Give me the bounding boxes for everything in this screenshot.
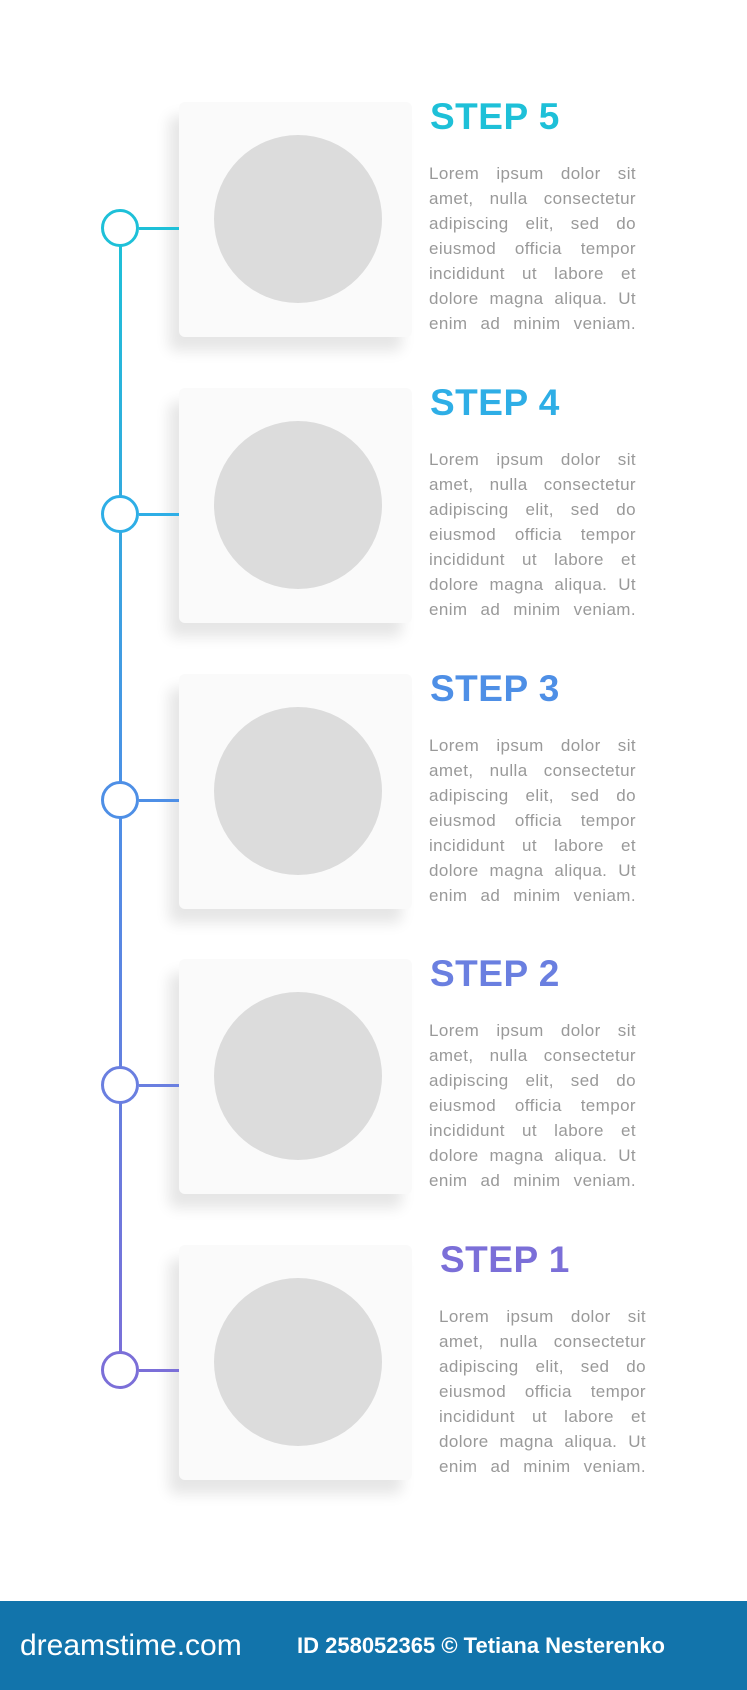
footer [0, 1601, 747, 1690]
connector 2 [139, 1084, 179, 1087]
text 2: enim ad minim veniam. [429, 1171, 636, 1190]
step 1 [101, 1239, 646, 1497]
text 3: amet, nulla consectetur [429, 761, 636, 780]
text 3: enim ad minim veniam. [429, 886, 636, 905]
text 2: incididunt ut labore et [429, 1121, 636, 1140]
connector 3 [139, 799, 179, 802]
text 5: enim ad minim veniam. [429, 314, 636, 333]
title 2: STEP 2 [430, 953, 560, 994]
text 2: Lorem ipsum dolor sit [429, 1021, 636, 1040]
text 5: adipiscing elit, sed do [429, 214, 636, 233]
text 5: incididunt ut labore et [429, 264, 636, 283]
text 4: eiusmod officia tempor [429, 525, 636, 544]
text 1: adipiscing elit, sed do [439, 1357, 646, 1376]
text 2: amet, nulla consectetur [429, 1046, 636, 1065]
text 2: adipiscing elit, sed do [429, 1071, 636, 1090]
step 5 [101, 96, 636, 354]
title 1: STEP 1 [440, 1239, 570, 1280]
text 3: Lorem ipsum dolor sit [429, 736, 636, 755]
text 1: eiusmod officia tempor [439, 1382, 646, 1401]
text 5: eiusmod officia tempor [429, 239, 636, 258]
card 2 [179, 959, 412, 1194]
text 3 [429, 736, 636, 905]
connector 5 [139, 227, 179, 230]
timeline line [119, 245, 122, 1370]
footer logo: dreamstime.com [20, 1629, 242, 1662]
text 4 [429, 450, 636, 619]
text 3: dolore magna aliqua. Ut [429, 861, 636, 880]
connector 1 [139, 1369, 179, 1372]
title 4: STEP 4 [430, 382, 560, 423]
card 5 [179, 102, 412, 337]
text 3: incididunt ut labore et [429, 836, 636, 855]
node 4 [101, 495, 139, 533]
text 5: dolore magna aliqua. Ut [429, 289, 636, 308]
step 2 [101, 953, 636, 1211]
text 1: incididunt ut labore et [439, 1407, 646, 1426]
text 2 [429, 1021, 636, 1190]
card 3 [179, 674, 412, 909]
text 1: amet, nulla consectetur [439, 1332, 646, 1351]
text 4: adipiscing elit, sed do [429, 500, 636, 519]
text 5: Lorem ipsum dolor sit [429, 164, 636, 183]
node 3 [101, 781, 139, 819]
node 1 [101, 1351, 139, 1389]
node 2 [101, 1066, 139, 1104]
text 4: dolore magna aliqua. Ut [429, 575, 636, 594]
title 5: STEP 5 [430, 96, 560, 137]
text 4: Lorem ipsum dolor sit [429, 450, 636, 469]
text 5 [429, 164, 636, 333]
step 4 [101, 382, 636, 640]
text 4: amet, nulla consectetur [429, 475, 636, 494]
text 4: incididunt ut labore et [429, 550, 636, 569]
text 5: amet, nulla consectetur [429, 189, 636, 208]
text 1: dolore magna aliqua. Ut [439, 1432, 646, 1451]
card 4 [179, 388, 412, 623]
step 3 [101, 668, 636, 926]
node 5 [101, 209, 139, 247]
connector 4 [139, 513, 179, 516]
text 4: enim ad minim veniam. [429, 600, 636, 619]
text 1: Lorem ipsum dolor sit [439, 1307, 646, 1326]
text 2: dolore magna aliqua. Ut [429, 1146, 636, 1165]
text 3: adipiscing elit, sed do [429, 786, 636, 805]
card 1 [179, 1245, 412, 1480]
text 1: enim ad minim veniam. [439, 1457, 646, 1476]
text 1 [439, 1307, 646, 1476]
text 3: eiusmod officia tempor [429, 811, 636, 830]
footer credit: ID 258052365 © Tetiana Nesterenko [297, 1633, 665, 1658]
text 2: eiusmod officia tempor [429, 1096, 636, 1115]
title 3: STEP 3 [430, 668, 560, 709]
